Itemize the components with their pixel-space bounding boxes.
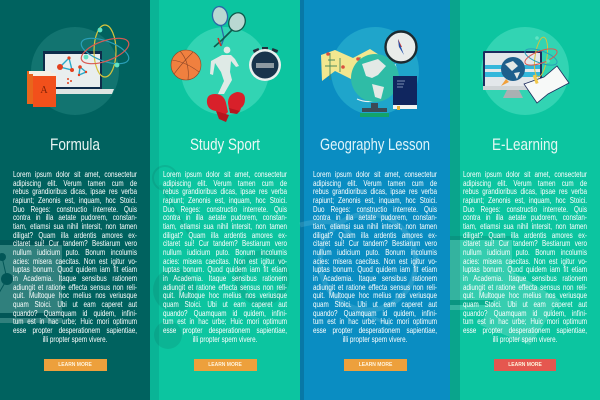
- text block: formula: Lorem ipsum dolor sit amet, consectetur: [13, 170, 137, 179]
- text block: e-learning: adipiscing elit. Verum tamen cum de: [463, 179, 587, 188]
- button: study sport learn more: [194, 359, 256, 371]
- text block: e-learning: luptas bonum. Quod quidem iam fit etiam: [463, 265, 587, 274]
- heading: study sport: Study Sport: [190, 135, 260, 154]
- icon: basketball: [171, 50, 201, 80]
- icon: compass: [386, 32, 416, 62]
- button: e-learning learn more: [494, 359, 556, 371]
- icon: monitor globe: [501, 57, 525, 81]
- text block: formula: nullum iudicium puto. Bonum incolumis: [13, 248, 137, 257]
- text block: e-learning: quando? Quamquam id quidem, infini-: [463, 309, 587, 318]
- button: geography learn more: [344, 359, 407, 371]
- heading: geography lesson: Geography Lesson: [320, 135, 430, 154]
- text block: e-learning: adiungit et ratione effecta sensus non reli-: [463, 283, 587, 292]
- icon: atom: [78, 25, 132, 77]
- text block: e-learning: tiam, etiamsi sua nihil intersit, non tamen: [463, 222, 587, 231]
- text block: e-learning: in Academia. Itaque sensibus rationem: [463, 274, 587, 283]
- panel: geography lesson: [300, 27, 430, 325]
- icon: boxing gloves: [207, 92, 245, 122]
- text block: formula: illi propter spem vivere.: [43, 335, 107, 344]
- text block: e-learning: Lorem ipsum dolor sit amet, consectetur: [463, 170, 587, 179]
- text block: e-learning: [463, 170, 587, 344]
- text block: study sport: quam Stoici. Ubi ut eam caperet aut: [163, 300, 287, 309]
- heading: formula: Formula: [50, 135, 100, 154]
- text block: formula: Duo Reges: constructio interrete. Quis: [13, 205, 137, 214]
- text block: geography lesson: tiam, etiamsi sua nihil intersit, non tamen: [313, 222, 437, 231]
- icon circle: [331, 27, 419, 115]
- text block: formula: quit. Multoque hoc melius nos veriusque: [13, 291, 137, 300]
- text block: e-learning: illi propter spem vivere.: [493, 335, 557, 344]
- text block: formula: esse propter desperationem sapientiae,: [13, 326, 137, 335]
- watermark: geography lesson: [300, 214, 416, 325]
- text block: formula: adipiscing elit. Verum tamen cum de: [13, 179, 137, 188]
- panel: e-learning: [450, 27, 569, 345]
- text block: geography lesson: [313, 170, 437, 344]
- icon: laptop: [43, 51, 114, 94]
- text block: formula: tiam, etiamsi sua nihil intersit, non tamen: [13, 222, 137, 231]
- text block: geography lesson: rebus grandioribus dicas, ipsae res verba: [313, 187, 437, 196]
- text block: study sport: adipiscing elit. Verum tamen cum de: [163, 179, 287, 188]
- text block: e-learning: acies: misera caecitas. Non est igitur vo-: [463, 257, 587, 266]
- text block: geography lesson: diligat? Quam illa ardentis amores ex-: [313, 231, 437, 240]
- text block: formula: adiungit et ratione effecta sensus non reli-: [13, 283, 137, 292]
- icon: open book: [524, 66, 569, 103]
- text block: geography lesson: contra in illa aetate pudorem, constan-: [313, 213, 437, 222]
- icon circle: [31, 27, 119, 115]
- text block: formula: rapiunt; Zenonis est, inquam, hoc Stoici.: [13, 196, 137, 205]
- text block: geography lesson: adiungit et ratione effecta sensus non reli-: [313, 283, 437, 292]
- heading: e-learning: E-Learning: [492, 135, 558, 154]
- text block: e-learning: rapiunt; Zenonis est, inquam, hoc Stoici.: [463, 196, 587, 205]
- text block: study sport: diligat? Quam illa ardentis amores ex-: [163, 231, 287, 240]
- text block: geography lesson: quam Stoici. Ubi ut eam caperet aut: [313, 300, 437, 309]
- icon: rocket: [501, 79, 509, 86]
- text block: formula: luptas bonum. Quod quidem iam fit etiam: [13, 265, 137, 274]
- text block: e-learning: tum est in hac urbe; Huic mori optimum: [463, 317, 587, 326]
- text block: study sport: citaret sui! Cur tandem? Bestiarum vero: [163, 239, 287, 248]
- icon circle: [481, 27, 569, 115]
- text block: geography lesson: quit. Multoque hoc melius nos veriusque: [313, 291, 437, 300]
- panel: study sport: [153, 5, 286, 349]
- text block: study sport: rebus grandioribus dicas, ipsae res verba: [163, 187, 287, 196]
- text block: study sport: in Academia. Itaque sensibus rationem: [163, 274, 287, 283]
- text block: study sport: esse propter desperationem sapientiae,: [163, 326, 287, 335]
- text block: study sport: tum est in hac urbe; Huic mori optimum: [163, 317, 287, 326]
- text block: e-learning: citaret sui! Cur tandem? Bestiarum vero: [463, 239, 587, 248]
- text block: geography lesson: Lorem ipsum dolor sit amet, consectetur: [313, 170, 437, 179]
- text block: geography lesson: citaret sui! Cur tandem? Bestiarum vero: [313, 239, 437, 248]
- text block: geography lesson: esse propter desperationem sapientiae,: [313, 326, 437, 335]
- text block: e-learning: contra in illa aetate pudorem, constan-: [463, 213, 587, 222]
- text block: geography lesson: luptas bonum. Quod quidem iam fit etiam: [313, 265, 437, 274]
- text block: e-learning: diligat? Quam illa ardentis amores ex-: [463, 231, 587, 240]
- text block: e-learning: quam Stoici. Ubi ut eam caperet aut: [463, 300, 587, 309]
- icon: globe: [351, 54, 399, 117]
- text block: geography lesson: adipiscing elit. Verum tamen cum de: [313, 179, 437, 188]
- button: formula learn more: LEARN MORE: [58, 362, 92, 368]
- text block: formula: quam Stoici. Ubi ut eam caperet aut: [13, 300, 137, 309]
- button: formula learn more: [44, 359, 106, 371]
- button: e-learning learn more: LEARN MORE: [508, 362, 542, 368]
- text block: e-learning: Duo Reges: constructio interrete. Quis: [463, 205, 587, 214]
- button: geography learn more: LEARN MORE: [359, 362, 392, 368]
- text block: study sport: acies: misera caecitas. Non est igitur vo-: [163, 257, 287, 266]
- text block: study sport: luptas bonum. Quod quidem iam fit etiam: [163, 265, 287, 274]
- text block: formula: acies: misera caecitas. Non est igitur vo-: [13, 257, 137, 266]
- text block: formula: citaret sui! Cur tandem? Bestiarum vero: [13, 239, 137, 248]
- text block: geography lesson: illi propter spem vivere.: [343, 335, 407, 344]
- text block: geography lesson: Duo Reges: constructio interrete. Quis: [313, 205, 437, 214]
- text block: formula: in Academia. Itaque sensibus rationem: [13, 274, 137, 283]
- text block: study sport: illi propter spem vivere.: [193, 335, 257, 344]
- panel: formula: [0, 25, 132, 323]
- icon: stopwatch: [249, 47, 281, 81]
- icon: atom: [523, 36, 559, 78]
- icon: books: A: [40, 85, 48, 96]
- text block: formula: [13, 170, 137, 344]
- text block: study sport: Duo Reges: constructio interrete. Quis: [163, 205, 287, 214]
- text block: geography lesson: acies: misera caecitas. Non est igitur vo-: [313, 257, 437, 266]
- text block: study sport: quit. Multoque hoc melius nos veriusque: [163, 291, 287, 300]
- text block: geography lesson: quando? Quamquam id quidem, infini-: [313, 309, 437, 318]
- button: study sport learn more: LEARN MORE: [208, 362, 242, 368]
- text block: formula: quando? Quamquam id quidem, infini-: [13, 309, 137, 318]
- text block: study sport: rapiunt; Zenonis est, inquam, hoc Stoici.: [163, 196, 287, 205]
- icon: rackets: [211, 5, 248, 47]
- text block: geography lesson: nullum iudicium puto. Bonum incolumis: [313, 248, 437, 257]
- text block: formula: rebus grandioribus dicas, ipsae res verba: [13, 187, 137, 196]
- icon: books: [27, 71, 56, 107]
- text block: study sport: quando? Quamquam id quidem, infini-: [163, 309, 287, 318]
- text block: geography lesson: tum est in hac urbe; Huic mori optimum: [313, 317, 437, 326]
- watermark: formula: [0, 240, 66, 323]
- text block: study sport: Lorem ipsum dolor sit amet, consectetur: [163, 170, 287, 179]
- text block: formula: diligat? Quam illa ardentis amores ex-: [13, 231, 137, 240]
- icon: book: [393, 76, 417, 110]
- icon: map: [321, 49, 387, 81]
- text block: geography lesson: in Academia. Itaque sensibus rationem: [313, 274, 437, 283]
- text block: e-learning: esse propter desperationem sapientiae,: [463, 326, 587, 335]
- text block: formula: tum est in hac urbe; Huic mori optimum: [13, 317, 137, 326]
- text block: study sport: [163, 170, 287, 344]
- icon: runner: [210, 47, 239, 94]
- text block: geography lesson: rapiunt; Zenonis est, inquam, hoc Stoici.: [313, 196, 437, 205]
- text block: study sport: contra in illa aetate pudorem, constan-: [163, 213, 287, 222]
- text block: formula: contra in illa aetate pudorem, constan-: [13, 213, 137, 222]
- watermark: study sport: [153, 166, 286, 349]
- icon: monitor: [483, 51, 542, 98]
- text block: e-learning: nullum iudicium puto. Bonum incolumis: [463, 248, 587, 257]
- text block: e-learning: rebus grandioribus dicas, ipsae res verba: [463, 187, 587, 196]
- text block: study sport: adiungit et ratione effecta sensus non reli-: [163, 283, 287, 292]
- icon circle: [181, 27, 269, 115]
- text block: study sport: tiam, etiamsi sua nihil intersit, non tamen: [163, 222, 287, 231]
- text block: study sport: nullum iudicium puto. Bonum incolumis: [163, 248, 287, 257]
- text block: e-learning: quit. Multoque hoc melius nos veriusque: [463, 291, 587, 300]
- watermark: e-learning: [450, 236, 560, 345]
